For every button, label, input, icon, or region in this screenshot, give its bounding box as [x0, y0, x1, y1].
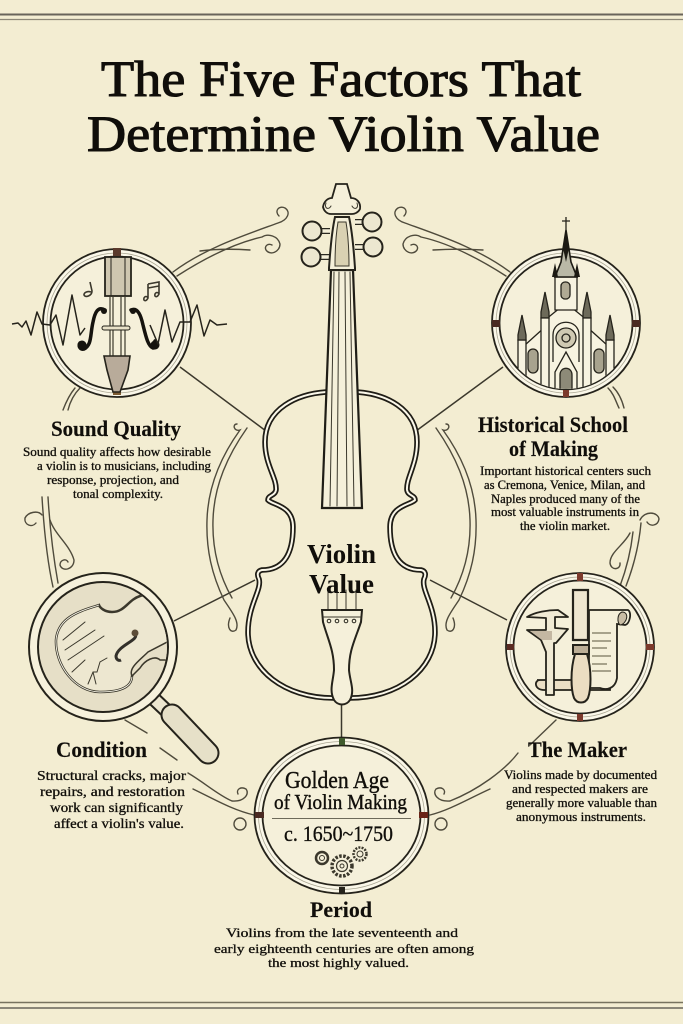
bottom border rule — [0, 1002, 683, 1008]
flourish: left inner arc — [207, 424, 247, 631]
panel: period — [214, 738, 475, 970]
text: period description — [214, 925, 475, 970]
central violin — [248, 184, 435, 704]
text: sound quality description: a violin is to musicians, including — [37, 459, 211, 473]
heading: Sound Quality: Sound Quality — [51, 416, 181, 441]
text: historical school description: as Cremona, Venice, Milan, and — [484, 478, 646, 492]
text: condition description: repairs, and restoration — [40, 784, 185, 799]
panel: the maker — [504, 573, 658, 824]
text: condition description — [37, 768, 187, 831]
text: golden age label: Golden Age — [285, 768, 389, 794]
text: golden age label: c. 1650~1750 — [284, 821, 393, 846]
panel: condition — [29, 573, 208, 831]
text: golden age label — [272, 768, 411, 846]
text: period description: Violins from the late seventeenth and — [226, 925, 459, 940]
violin neck and fingerboard — [322, 270, 362, 508]
violin pegbox — [329, 217, 355, 270]
text: sound quality description: Sound quality affects how desirable — [23, 445, 212, 459]
center label: Violin Value — [307, 539, 376, 599]
panel: sound quality — [12, 248, 227, 501]
medallion: golden age — [254, 738, 428, 894]
heading: Historical School of Making: Historical School — [478, 412, 628, 437]
text: historical school description: Naples produced many of the — [491, 492, 641, 506]
magnifier handle — [153, 698, 208, 753]
flourish: top left — [63, 207, 288, 410]
text: the maker description: and respected makers are — [512, 782, 649, 796]
heading: Condition: Condition — [56, 737, 147, 762]
center label: Violin Value: Violin — [307, 539, 376, 569]
connector lines from violin to factors — [174, 367, 507, 738]
text: the maker description: Violins made by documented — [504, 768, 658, 782]
icon: violin waveform medallion — [12, 248, 227, 397]
violin scroll — [323, 184, 360, 214]
violin body outline — [248, 392, 435, 698]
flourish: right inner arc — [436, 424, 476, 631]
violin strings above tailpiece — [328, 590, 356, 610]
text: period description: the most highly valued. — [268, 955, 409, 970]
icon: maker tools medallion — [506, 573, 654, 721]
flourish: bottom right — [430, 720, 556, 830]
text: the maker description: anonymous instruments. — [516, 810, 646, 824]
text: historical school description: the violin market. — [520, 519, 610, 533]
text: the maker description: generally more valuable than — [506, 796, 657, 810]
heading: Period: Period — [310, 897, 372, 922]
flourish: maker — [610, 513, 659, 586]
title — [87, 52, 600, 163]
center label: Violin Value: Value — [309, 569, 374, 599]
heading: Historical School of Making: of Making — [509, 436, 598, 461]
text: historical school description — [480, 464, 652, 533]
violin pegs — [302, 212, 382, 266]
text: historical school description: most valuable instruments in — [491, 505, 639, 519]
text: golden age label: of Violin Making — [274, 790, 407, 814]
magnifier lens — [29, 573, 177, 721]
title: The Five Factors That — [101, 52, 581, 108]
flourish: bottom left — [125, 720, 254, 830]
icon: magnifying glass over violin — [29, 573, 208, 753]
top border rule — [0, 14, 683, 20]
text: the maker description — [504, 768, 658, 824]
text: condition description: work can significantly — [50, 800, 183, 815]
text: condition description: affect a violin's value. — [54, 816, 184, 831]
text: sound quality description: tonal complexity. — [73, 487, 163, 501]
text: sound quality description — [23, 445, 212, 501]
panel: historical school of making — [478, 217, 652, 533]
title: Determine Violin Value — [87, 107, 600, 163]
text: condition description: Structural cracks, major — [37, 768, 187, 783]
heading: Historical School of Making — [478, 412, 628, 461]
text: historical school description: Important historical centers such — [480, 464, 652, 478]
violin tailpiece — [322, 610, 362, 704]
icon: cathedral medallion — [492, 217, 640, 400]
text: sound quality description: response, projection, and — [47, 473, 180, 487]
icon: gears — [316, 848, 366, 876]
flourish: top right — [395, 207, 624, 408]
text: period description: early eighteenth centuries are often among — [214, 941, 475, 956]
heading: The Maker: The Maker — [528, 737, 627, 762]
flourish: condition — [25, 497, 74, 587]
